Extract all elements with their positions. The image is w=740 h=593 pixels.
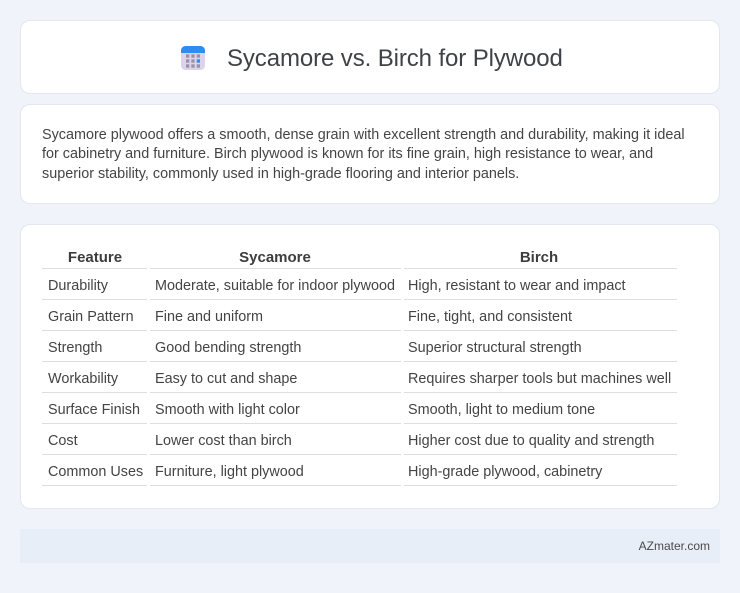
row: Cost: Cost <box>48 433 78 449</box>
row: Workability <box>42 371 677 393</box>
row: Grain Pattern <box>42 309 677 331</box>
row: Strength <box>42 340 677 362</box>
footer bar <box>20 529 720 562</box>
row: Durability: High, resistant to wear and impact <box>408 278 626 294</box>
footer source text: AZmater.com <box>639 539 710 553</box>
row: Surface Finish: Smooth, light to medium tone <box>408 402 595 418</box>
table header: Birch <box>520 249 558 266</box>
row: Workability: Easy to cut and shape <box>155 371 297 387</box>
description text: superior stability, commonly used in high-grade flooring and interior panels. <box>42 166 519 182</box>
description text: for cabinetry and furniture. Birch plywood is known for its fine grain, high resistance to wear, and <box>42 146 653 162</box>
row: Workability: Requires sharper tools but machines well <box>408 371 671 387</box>
row: Cost <box>42 433 677 455</box>
row: Strength: Superior structural strength <box>408 340 582 356</box>
description text: Sycamore plywood offers a smooth, dense grain with excellent strength and durability, making it ideal <box>42 127 685 143</box>
row: Surface Finish <box>42 402 677 424</box>
title: Sycamore vs. Birch for Plywood <box>227 45 563 72</box>
row: Cost: Higher cost due to quality and strength <box>408 433 654 449</box>
table header: Feature <box>68 249 122 266</box>
row: Common Uses <box>42 464 677 486</box>
panel: title card <box>20 20 720 94</box>
icon: calendar <box>181 46 205 70</box>
row: Durability: Durability <box>48 278 108 294</box>
table header <box>42 249 677 269</box>
table header: Sycamore <box>239 249 311 266</box>
row: Durability <box>42 278 677 300</box>
row: Workability: Workability <box>48 371 118 387</box>
panel: comparison table <box>20 224 720 509</box>
row: Cost: Lower cost than birch <box>155 433 292 449</box>
row: Strength: Strength <box>48 340 102 356</box>
row: Grain Pattern: Fine and uniform <box>155 309 263 325</box>
row: Common Uses: Common Uses <box>48 464 143 480</box>
row: Durability: Moderate, suitable for indoor plywood <box>155 278 395 294</box>
row: Surface Finish: Smooth with light color <box>155 402 300 418</box>
row: Grain Pattern: Grain Pattern <box>48 309 134 325</box>
description text <box>42 127 685 182</box>
row: Surface Finish: Surface Finish <box>48 402 140 418</box>
panel: description <box>20 104 720 204</box>
row: Grain Pattern: Fine, tight, and consistent <box>408 309 572 325</box>
row: Common Uses: Furniture, light plywood <box>155 464 304 480</box>
row: Common Uses: High-grade plywood, cabinetry <box>408 464 602 480</box>
row: Strength: Good bending strength <box>155 340 301 356</box>
